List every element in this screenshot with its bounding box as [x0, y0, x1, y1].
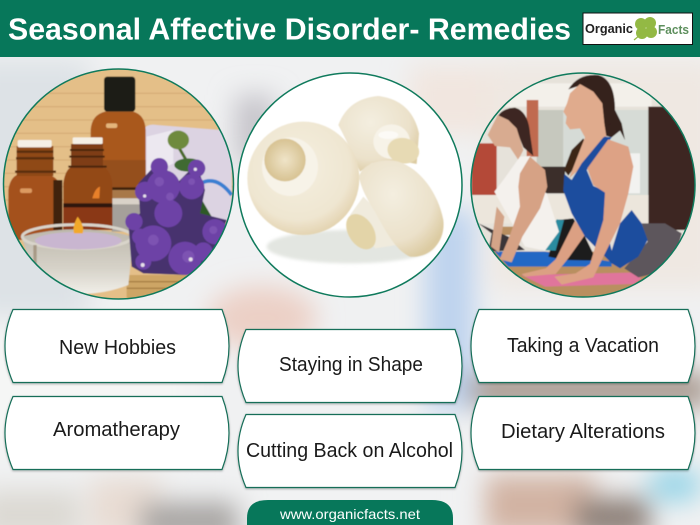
middle bottle [63, 167, 112, 230]
gym background [472, 74, 685, 252]
photo circle: mushrooms [238, 73, 462, 297]
footer url badge: www.organicfacts.net [279, 506, 420, 522]
front woman near arm [554, 139, 633, 285]
box: Taking a Vacation [471, 310, 695, 382]
icon: clover leaf [634, 17, 657, 40]
big mushroom [247, 122, 359, 235]
box: Aromatherapy [5, 396, 229, 470]
box: Dietary Alterations [471, 396, 695, 470]
blue mat [495, 252, 612, 267]
box: Staying in Shape [238, 330, 462, 402]
box: New Hobbies: New Hobbies [59, 337, 176, 359]
left bottle [8, 175, 62, 240]
small bottle glass [112, 198, 140, 232]
wood floor [126, 274, 188, 298]
box: New Hobbies [5, 310, 229, 382]
flower stems and leaves [178, 148, 188, 160]
front mushroom [350, 197, 397, 248]
box: Aromatherapy: Aromatherapy [53, 419, 180, 441]
footer url badge [247, 500, 453, 525]
logo: Facts [658, 22, 689, 37]
box: Cutting Back on Alcohol [238, 414, 462, 488]
header bar [0, 0, 700, 57]
jar [143, 125, 232, 220]
pink mat [522, 273, 642, 287]
front woman ponytail [564, 138, 586, 176]
front woman hair [568, 75, 625, 140]
back mushroom [338, 96, 419, 172]
front woman tank top [563, 137, 648, 268]
candle [22, 229, 133, 294]
back woman arm [500, 157, 547, 262]
front woman face [563, 84, 607, 178]
back woman face [488, 115, 523, 160]
blue ribbon [201, 181, 232, 195]
back woman leg [478, 223, 525, 252]
logo: Organic [585, 21, 633, 36]
front woman far arm [522, 221, 586, 277]
mushroom shadow [267, 230, 433, 263]
back woman far arm [491, 207, 504, 253]
box: Cutting Back on Alcohol: Cutting Back on Alcohol [246, 440, 453, 462]
photo circle: aromatherapy [0, 63, 240, 303]
back bottle [90, 110, 146, 176]
back woman top [494, 156, 559, 251]
photo circle: yoga [465, 60, 700, 300]
box: Taking a Vacation: Taking a Vacation [507, 335, 659, 357]
title: Seasonal Affective Disorder- Remedies [8, 12, 571, 46]
front woman leggings [624, 223, 682, 277]
back woman hair [498, 108, 533, 156]
box: Staying in Shape: Staying in Shape [279, 354, 423, 376]
flowers [128, 160, 227, 275]
logo [583, 13, 692, 44]
box: Dietary Alterations: Dietary Alterations [501, 421, 665, 443]
